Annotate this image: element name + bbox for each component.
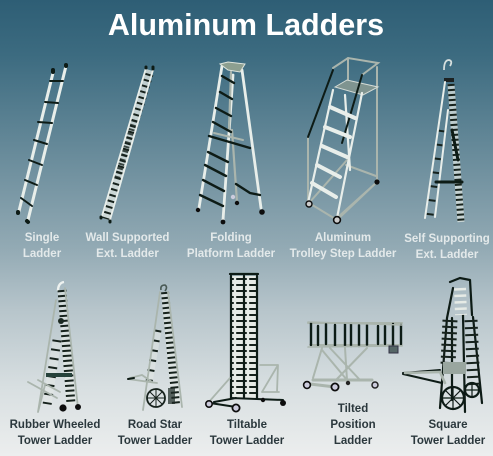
icon: wall supported extension ladder — [101, 67, 153, 222]
label: square tower ladder: Tower Ladder — [411, 435, 486, 447]
title: Aluminum Ladders — [108, 8, 384, 42]
icon: tilted position ladder — [304, 322, 402, 391]
icon: folding platform ladder — [196, 62, 265, 224]
label: tilted position ladder: Ladder — [334, 435, 373, 447]
icon: self supporting extension ladder — [425, 60, 462, 222]
label: aluminum trolley step ladder: Aluminum — [315, 232, 371, 244]
label: tiltable tower ladder: Tiltable — [227, 419, 267, 431]
label: folding platform ladder: Folding — [210, 232, 252, 244]
icon: tiltable tower ladder — [206, 274, 286, 412]
label: tiltable tower ladder: Tower Ladder — [210, 435, 285, 447]
label: square tower ladder: Square — [428, 419, 468, 431]
icon: road star tower ladder — [128, 285, 182, 410]
ladders illustration group — [18, 58, 482, 412]
label: wall supported ext. ladder: Wall Supported — [86, 232, 169, 244]
icon: single ladder — [18, 65, 66, 222]
label: self supporting ext. ladder: Ext. Ladder — [416, 249, 479, 261]
label: road star tower ladder: Tower Ladder — [118, 435, 193, 447]
label: folding platform ladder: Platform Ladder — [187, 248, 276, 260]
label: single ladder: Single — [25, 232, 59, 244]
label: single ladder: Ladder — [23, 248, 62, 260]
label: wall supported ext. ladder: Ext. Ladder — [96, 248, 159, 260]
label: rubber wheeled tower ladder: Tower Ladder — [18, 435, 93, 447]
label: rubber wheeled tower ladder: Rubber Wheeled — [10, 419, 100, 431]
icon: square tower ladder — [403, 278, 482, 412]
label: self supporting ext. ladder: Self Supporting — [404, 233, 490, 245]
label: aluminum trolley step ladder: Trolley Step Ladder — [290, 248, 397, 260]
icon: rubber wheeled tower ladder — [28, 282, 81, 412]
icon: aluminum trolley step ladder — [306, 58, 380, 223]
label: road star tower ladder: Road Star — [128, 419, 182, 431]
label: tilted position ladder: Tilted — [338, 403, 368, 415]
label: tilted position ladder: Position — [330, 419, 376, 431]
